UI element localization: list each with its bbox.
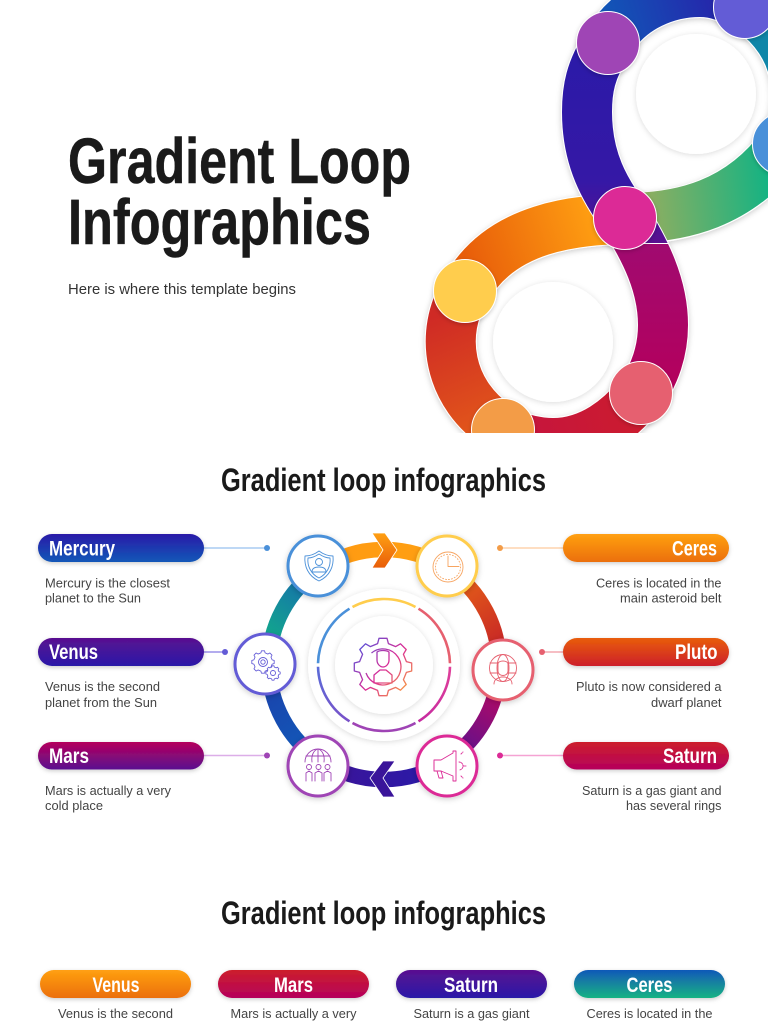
card: Ceres bbox=[574, 970, 725, 1021]
loop nodes bbox=[434, 0, 768, 462]
panel: Ceres bbox=[563, 534, 729, 606]
panel: Mars bbox=[38, 742, 204, 813]
node: shield bbox=[288, 536, 348, 596]
panel: Saturn bbox=[563, 742, 729, 813]
panel: Venus bbox=[38, 638, 204, 710]
node: gears bbox=[235, 634, 295, 694]
icon: gear with person bbox=[354, 638, 412, 696]
panel: Saturn: Saturn is a gas giant and bbox=[582, 784, 722, 798]
ring diagram bbox=[235, 533, 533, 797]
title: Infographics bbox=[68, 186, 371, 258]
card: Venus bbox=[40, 970, 191, 1021]
panel: Venus: planet from the Sun bbox=[45, 696, 157, 710]
panel: Ceres: Ceres bbox=[672, 538, 717, 560]
panel: Mercury: Mercury bbox=[49, 538, 115, 560]
panel: Mars: cold place bbox=[45, 799, 103, 813]
panel: Ceres: Ceres is located in the bbox=[596, 576, 722, 590]
panel: Saturn: has several rings bbox=[626, 799, 722, 813]
heading: section 2: Gradient loop infographics bbox=[221, 462, 546, 498]
card: Mars: Mars bbox=[274, 974, 313, 997]
loop segments bbox=[451, 0, 768, 443]
panel: Mercury: planet to the Sun bbox=[45, 592, 141, 606]
panel: Saturn: Saturn bbox=[663, 745, 717, 768]
title bbox=[68, 125, 411, 258]
panel: Mars: Mars is actually a very bbox=[45, 784, 172, 798]
inner white circles bbox=[493, 34, 756, 402]
subtitle: Here is where this template begins bbox=[68, 281, 296, 298]
connectors bbox=[204, 545, 563, 758]
panel: Pluto: Pluto is now considered a bbox=[576, 680, 722, 694]
node: globe with person bbox=[473, 640, 533, 700]
panel: Mars: Mars bbox=[49, 745, 89, 768]
arrow: bottom chevron bbox=[370, 761, 395, 797]
panel: Ceres: main asteroid belt bbox=[620, 592, 722, 606]
card: Ceres: Ceres is located in the bbox=[586, 1007, 713, 1021]
panel: Pluto: Pluto bbox=[675, 641, 718, 664]
panel: Venus: Venus is the second bbox=[45, 680, 160, 694]
panel: Venus: Venus bbox=[49, 641, 98, 664]
heading: section 3: Gradient loop infographics bbox=[221, 895, 546, 931]
card: Ceres: Ceres bbox=[626, 974, 672, 997]
card: Saturn bbox=[396, 970, 547, 1021]
card: Venus: Venus is the second bbox=[58, 1007, 173, 1021]
node: clock bbox=[417, 536, 477, 596]
central hub bbox=[308, 589, 460, 741]
figure-eight gradient loop bbox=[434, 0, 768, 462]
card: Venus: Venus bbox=[92, 974, 140, 997]
loop band halo bbox=[451, 0, 768, 443]
card: Saturn: Saturn is a gas giant bbox=[414, 1007, 530, 1021]
card: Saturn: Saturn bbox=[444, 974, 498, 997]
panel: Mercury: Mercury is the closest bbox=[45, 576, 171, 590]
ring segments bbox=[269, 549, 499, 780]
node: megaphone bbox=[417, 736, 477, 796]
panel: Pluto bbox=[563, 638, 729, 710]
card: Mars bbox=[218, 970, 369, 1021]
node: globe with people bbox=[288, 736, 348, 796]
arrow: top chevron bbox=[372, 533, 397, 568]
panel: Pluto: dwarf planet bbox=[651, 696, 722, 710]
title: Gradient Loop bbox=[68, 125, 411, 197]
card: Mars: Mars is actually a very bbox=[230, 1007, 357, 1021]
panel: Mercury bbox=[38, 534, 204, 606]
